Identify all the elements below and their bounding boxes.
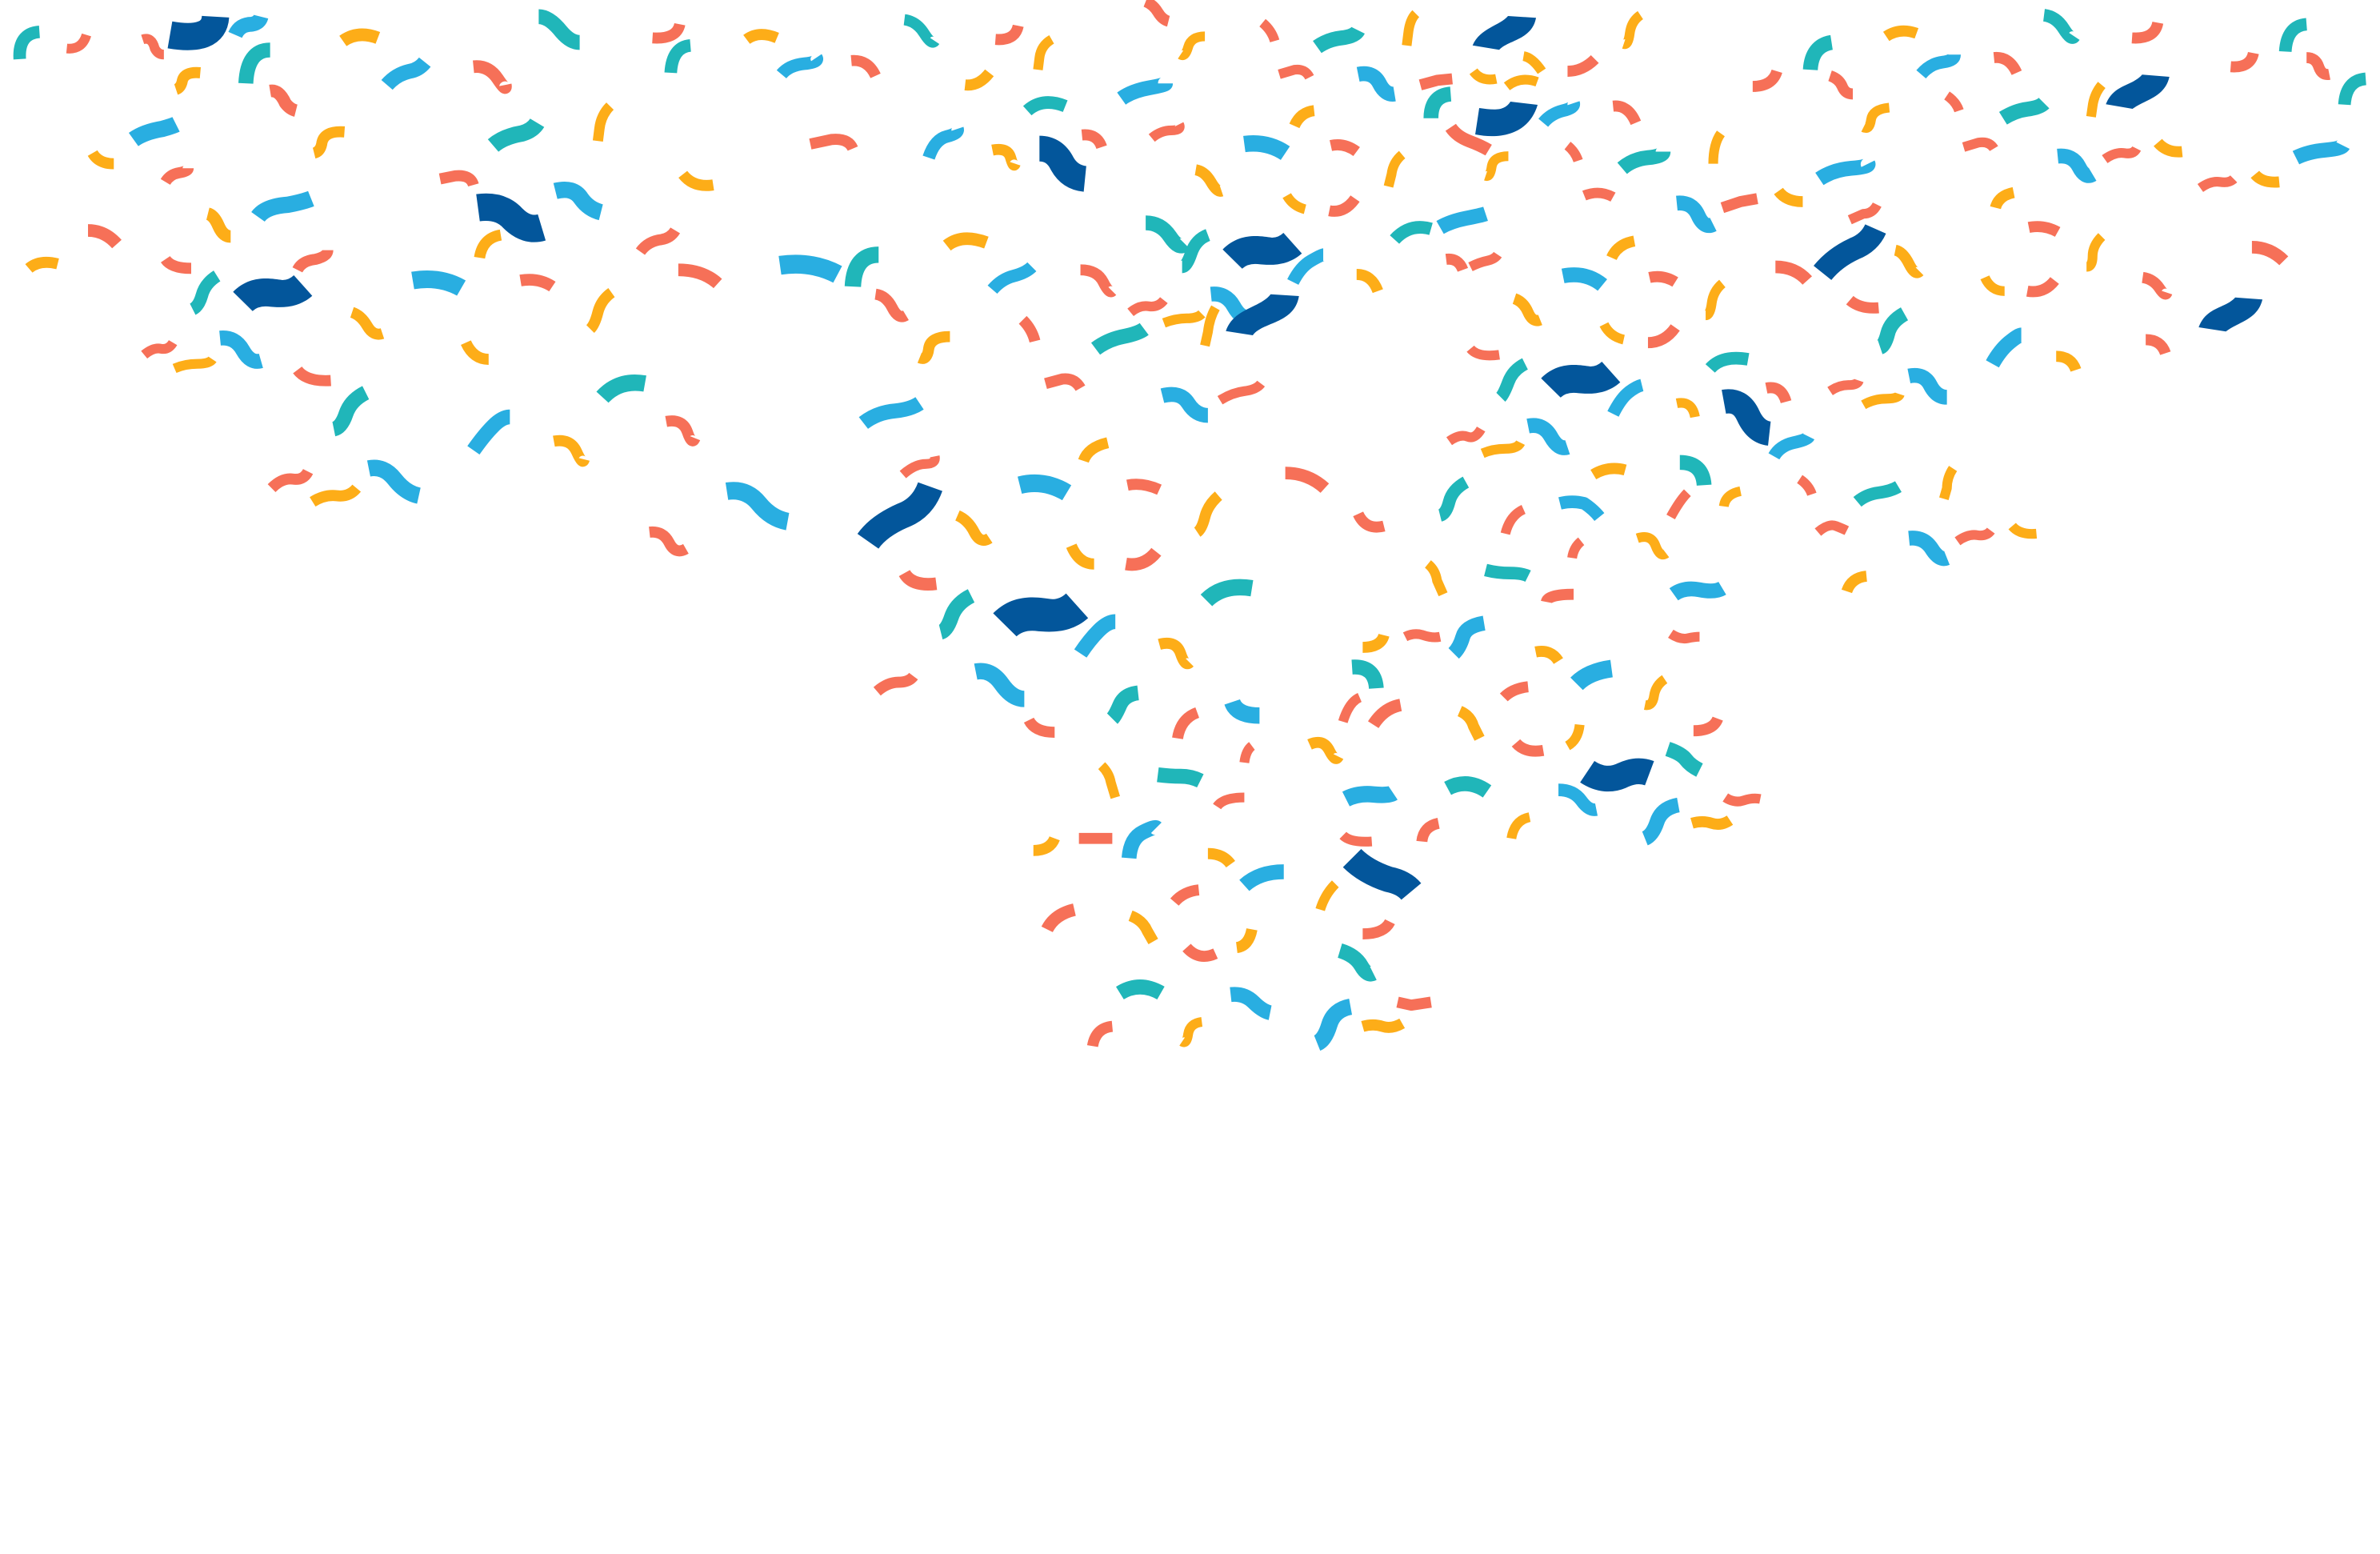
confetti: teal pieces [20, 15, 2366, 993]
confetti: coral red pieces [66, 2, 2330, 1046]
confetti: orange pieces [29, 14, 2279, 1042]
confetti: navy pieces [170, 16, 2262, 891]
confetti: blue pieces [134, 17, 2343, 1043]
